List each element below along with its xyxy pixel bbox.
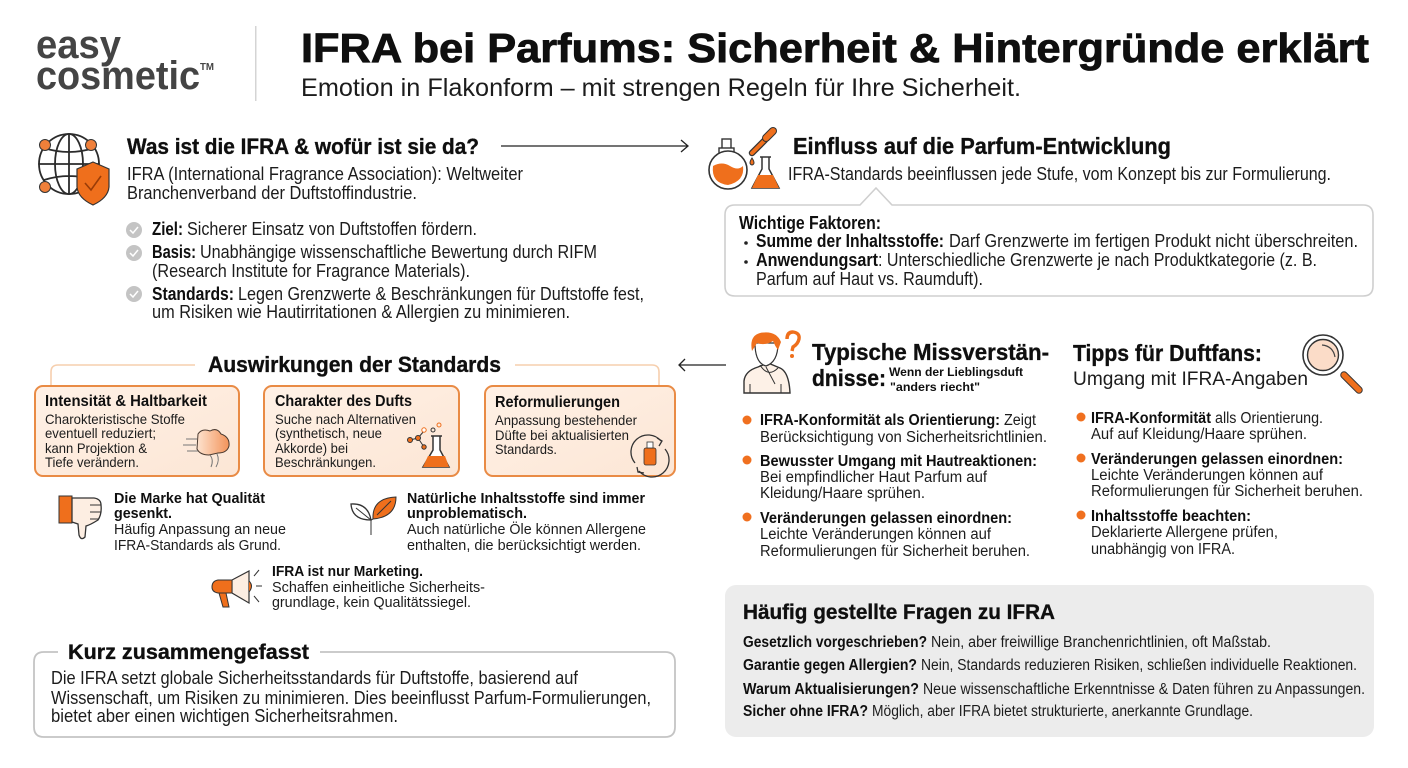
callout: Wichtige Faktoren: Summe der Inhaltsstoffe: [756, 231, 944, 251]
summary text [51, 668, 651, 726]
callout: Wichtige Faktoren: Wichtige Faktoren: [739, 213, 881, 233]
check list: Sicherer Einsatz von Duftstoffen fördern. [187, 219, 477, 239]
heading: Tipps für Duftfans: [1073, 340, 1262, 366]
callout: Wichtige Faktoren: Darf Grenzwerte im fertigen Produkt nicht überschreiten. [949, 231, 1358, 251]
heading [1073, 340, 1308, 390]
icon: bottle with cycle arrows [631, 435, 669, 477]
logo: easy cosmetic [36, 23, 214, 98]
list: Reformulierungen für Sicherheit beruhen. [1091, 483, 1363, 500]
summary text: bietet aber einen wichtigen Sicherheitsrahmen. [51, 706, 398, 726]
questions and answers: Neue wissenschaftliche Erkenntnisse & Daten führen zu Anpassungen. [923, 681, 1365, 698]
heading: Was ist die IFRA & wofür ist sie da? [127, 134, 479, 159]
list: IFRA-Konformität als Orientierung: [760, 412, 1000, 429]
card: Reformulierungen: Reformulierungen [495, 394, 620, 411]
intro text: Branchenverband der Duftstoffindustrie. [127, 183, 417, 203]
card: Reformulierungen [485, 386, 675, 477]
card: Intensität & Haltbarkeit: kann Projektion & [45, 440, 148, 456]
misconception: Marke: Die Marke hat Qualität [114, 490, 265, 507]
list: IFRA-Konformität [1091, 410, 1211, 427]
icon: thumbs down [59, 496, 101, 539]
questions and answers: Garantie gegen Allergien? [743, 657, 917, 674]
card: Charakter des Dufts: Suche nach Alternativen [275, 411, 416, 427]
panel: Typische Missverständnisse [742, 332, 1049, 560]
misconception: Marke: Häufig Anpassung an neue [114, 521, 286, 538]
check list: (Research Institute for Fragrance Materials). [152, 261, 470, 281]
card: Charakter des Dufts [264, 386, 459, 476]
subtitle: Emotion in Flakonform – mit strengen Regeln für Ihre Sicherheit. [301, 74, 1021, 102]
check list: Legen Grenzwerte & Beschränkungen für Duftstoffe fest, [238, 284, 644, 304]
icon: perfume bottle, pipette and flask [709, 131, 779, 189]
heading [812, 339, 1049, 394]
list: Bewusster Umgang mit Hautreaktionen: [760, 453, 1037, 470]
header [36, 23, 1369, 102]
check list: Unabhängige wissenschaftliche Bewertung durch RIFM [200, 242, 597, 262]
list: Berücksichtigung von Sicherheitsrichtlinien. [760, 429, 1047, 446]
panel: Auswirkungen der Standards [35, 352, 675, 611]
title: IFRA bei Parfums: Sicherheit & Hintergründe erklärt [301, 25, 1369, 71]
panel: Einfluss auf die Parfum-Entwicklung [709, 131, 1373, 296]
card: Charakter des Dufts: (synthetisch, neue [275, 425, 382, 441]
check list: Ziel: [152, 219, 183, 239]
misconception: Natürliche Inhaltsstoffe: Natürliche Inhaltsstoffe sind immer [407, 490, 645, 507]
list: alls Orientierung. [1215, 410, 1323, 427]
summary text: Die IFRA setzt globale Sicherheitsstandards für Duftstoffe, basierend auf [51, 668, 579, 688]
list: Reformulierungen für Sicherheit beruhen. [760, 543, 1030, 560]
check list: Basis: [152, 242, 196, 262]
panel: Kurz zusammengefasst [34, 641, 675, 737]
misconception: Marketing: grundlage, kein Qualitätssiegel. [272, 594, 471, 611]
list [742, 412, 1047, 560]
questions and answers: Möglich, aber IFRA bietet strukturierte, anerkannte Grundlage. [872, 703, 1253, 720]
list [1076, 410, 1363, 558]
list: Inhaltsstoffe beachten: [1091, 508, 1251, 525]
heading: Wenn der Lieblingsduft [889, 365, 1023, 379]
icon: magnifying glass [1303, 335, 1359, 390]
misconception: Marketing [212, 563, 485, 611]
check list [126, 219, 644, 322]
arrow to impacts [679, 359, 726, 371]
list: Bei empfindlicher Haut Parfum auf [760, 469, 988, 486]
logo: easy cosmetic: TM [200, 62, 214, 73]
panel: FAQ [725, 585, 1374, 737]
card: Charakter des Dufts: Beschränkungen. [275, 454, 376, 470]
card: Intensität & Haltbarkeit: Tiefe verändern. [45, 454, 139, 470]
list: Leichte Veränderungen können auf [760, 526, 992, 543]
list: Auf auf Kleidung/Haare sprühen. [1091, 426, 1307, 443]
icon: thinking person with question mark [744, 332, 799, 393]
misconception: Natürliche Inhaltsstoffe: unproblematisch. [407, 505, 527, 522]
questions and answers: Warum Aktualisierungen? [743, 681, 919, 698]
logo: easy cosmetic: cosmetic [36, 54, 200, 98]
panel: Tipps für Duftfans [1073, 335, 1363, 558]
callout: Wichtige Faktoren [725, 188, 1373, 296]
questions and answers: Sicher ohne IFRA? [743, 703, 868, 720]
list: unabhängig von IFRA. [1091, 541, 1235, 558]
heading: "anders riecht" [890, 380, 980, 394]
heading: Häufig gestellte Fragen zu IFRA [743, 601, 1055, 624]
card: Reformulierungen: Düfte bei aktualisierten [495, 427, 629, 443]
card: Reformulierungen: Anpassung bestehender [495, 412, 637, 428]
icon: leaves [351, 497, 396, 535]
intro text [127, 164, 523, 203]
icon: scent cloud [183, 430, 229, 467]
list: Zeigt [1004, 412, 1037, 429]
list: Veränderungen gelassen einordnen: [1091, 451, 1343, 468]
questions and answers: Gesetzlich vorgeschrieben? [743, 634, 927, 651]
icon: globe with shield [39, 134, 109, 205]
questions and answers: Nein, aber freiwillige Branchenrichtlinien, oft Maßstab. [931, 634, 1271, 651]
heading: Kurz zusammengefasst [68, 641, 309, 664]
icon: flask with molecule [408, 423, 449, 467]
heading: dnisse: [812, 365, 886, 391]
icon: megaphone [212, 570, 262, 607]
card: Intensität & Haltbarkeit [35, 386, 239, 476]
list: Deklarierte Allergene prüfen, [1091, 524, 1278, 541]
card: Intensität & Haltbarkeit: eventuell reduziert; [45, 425, 156, 441]
check list: Standards: [152, 284, 234, 304]
misconception: Marketing: Schaffen einheitliche Sicherheits- [272, 579, 485, 596]
panel: Was ist die IFRA [39, 134, 688, 322]
list: Veränderungen gelassen einordnen: [760, 510, 1012, 527]
card: Charakter des Dufts: Akkorde) bei [275, 440, 348, 456]
description: IFRA-Standards beeinflussen jede Stufe, vom Konzept bis zur Formulierung. [788, 164, 1331, 184]
heading: Auswirkungen der Standards [208, 352, 501, 377]
callout: Wichtige Faktoren: : Unterschiedliche Grenzwerte je nach Produktkategorie (z. B. [878, 250, 1317, 270]
check list: um Risiken wie Hautirritationen & Allergien zu minimieren. [152, 302, 570, 322]
heading: Typische Missverstän- [812, 339, 1049, 365]
misconception: Natürliche Inhaltsstoffe: Auch natürliche Öle können Allergene [407, 520, 646, 538]
callout: Wichtige Faktoren: Parfum auf Haut vs. Raumduft). [756, 269, 983, 289]
list: Leichte Veränderungen können auf [1091, 467, 1324, 484]
misconception: Marke: IFRA-Standards als Grund. [114, 537, 281, 554]
heading: Umgang mit IFRA-Angaben [1073, 369, 1308, 390]
bracket [51, 365, 659, 386]
logo: easy cosmetic: easy [36, 23, 122, 67]
card: Reformulierungen: Standards. [495, 441, 557, 457]
misconception: Natürliche Inhaltsstoffe: enthalten, die berücksichtigt werden. [407, 537, 641, 554]
misconception: Marketing: IFRA ist nur Marketing. [272, 563, 423, 580]
misconception: Marke [59, 490, 286, 554]
questions and answers [743, 634, 1365, 720]
arrow to development [501, 140, 688, 152]
misconception: Natürliche Inhaltsstoffe [351, 490, 646, 554]
summary text: Wissenschaft, um Risiken zu minimieren. Dies beeinflusst Parfum-Formulierungen, [51, 688, 651, 708]
callout: Wichtige Faktoren: Anwendungsart [756, 250, 878, 270]
intro text: IFRA (International Fragrance Association): Weltweiter [127, 164, 523, 184]
card: Charakter des Dufts: Charakter des Dufts [275, 393, 412, 410]
heading: Einfluss auf die Parfum-Entwicklung [793, 133, 1171, 159]
misconception: Marke: gesenkt. [114, 505, 172, 522]
list: Kleidung/Haare sprühen. [760, 485, 925, 502]
card: Intensität & Haltbarkeit: Charokteristische Stoffe [45, 411, 185, 427]
card: Intensität & Haltbarkeit: Intensität & Haltbarkeit [45, 393, 207, 410]
questions and answers: Nein, Standards reduzieren Risiken, schließen individuelle Reaktionen. [921, 657, 1357, 674]
